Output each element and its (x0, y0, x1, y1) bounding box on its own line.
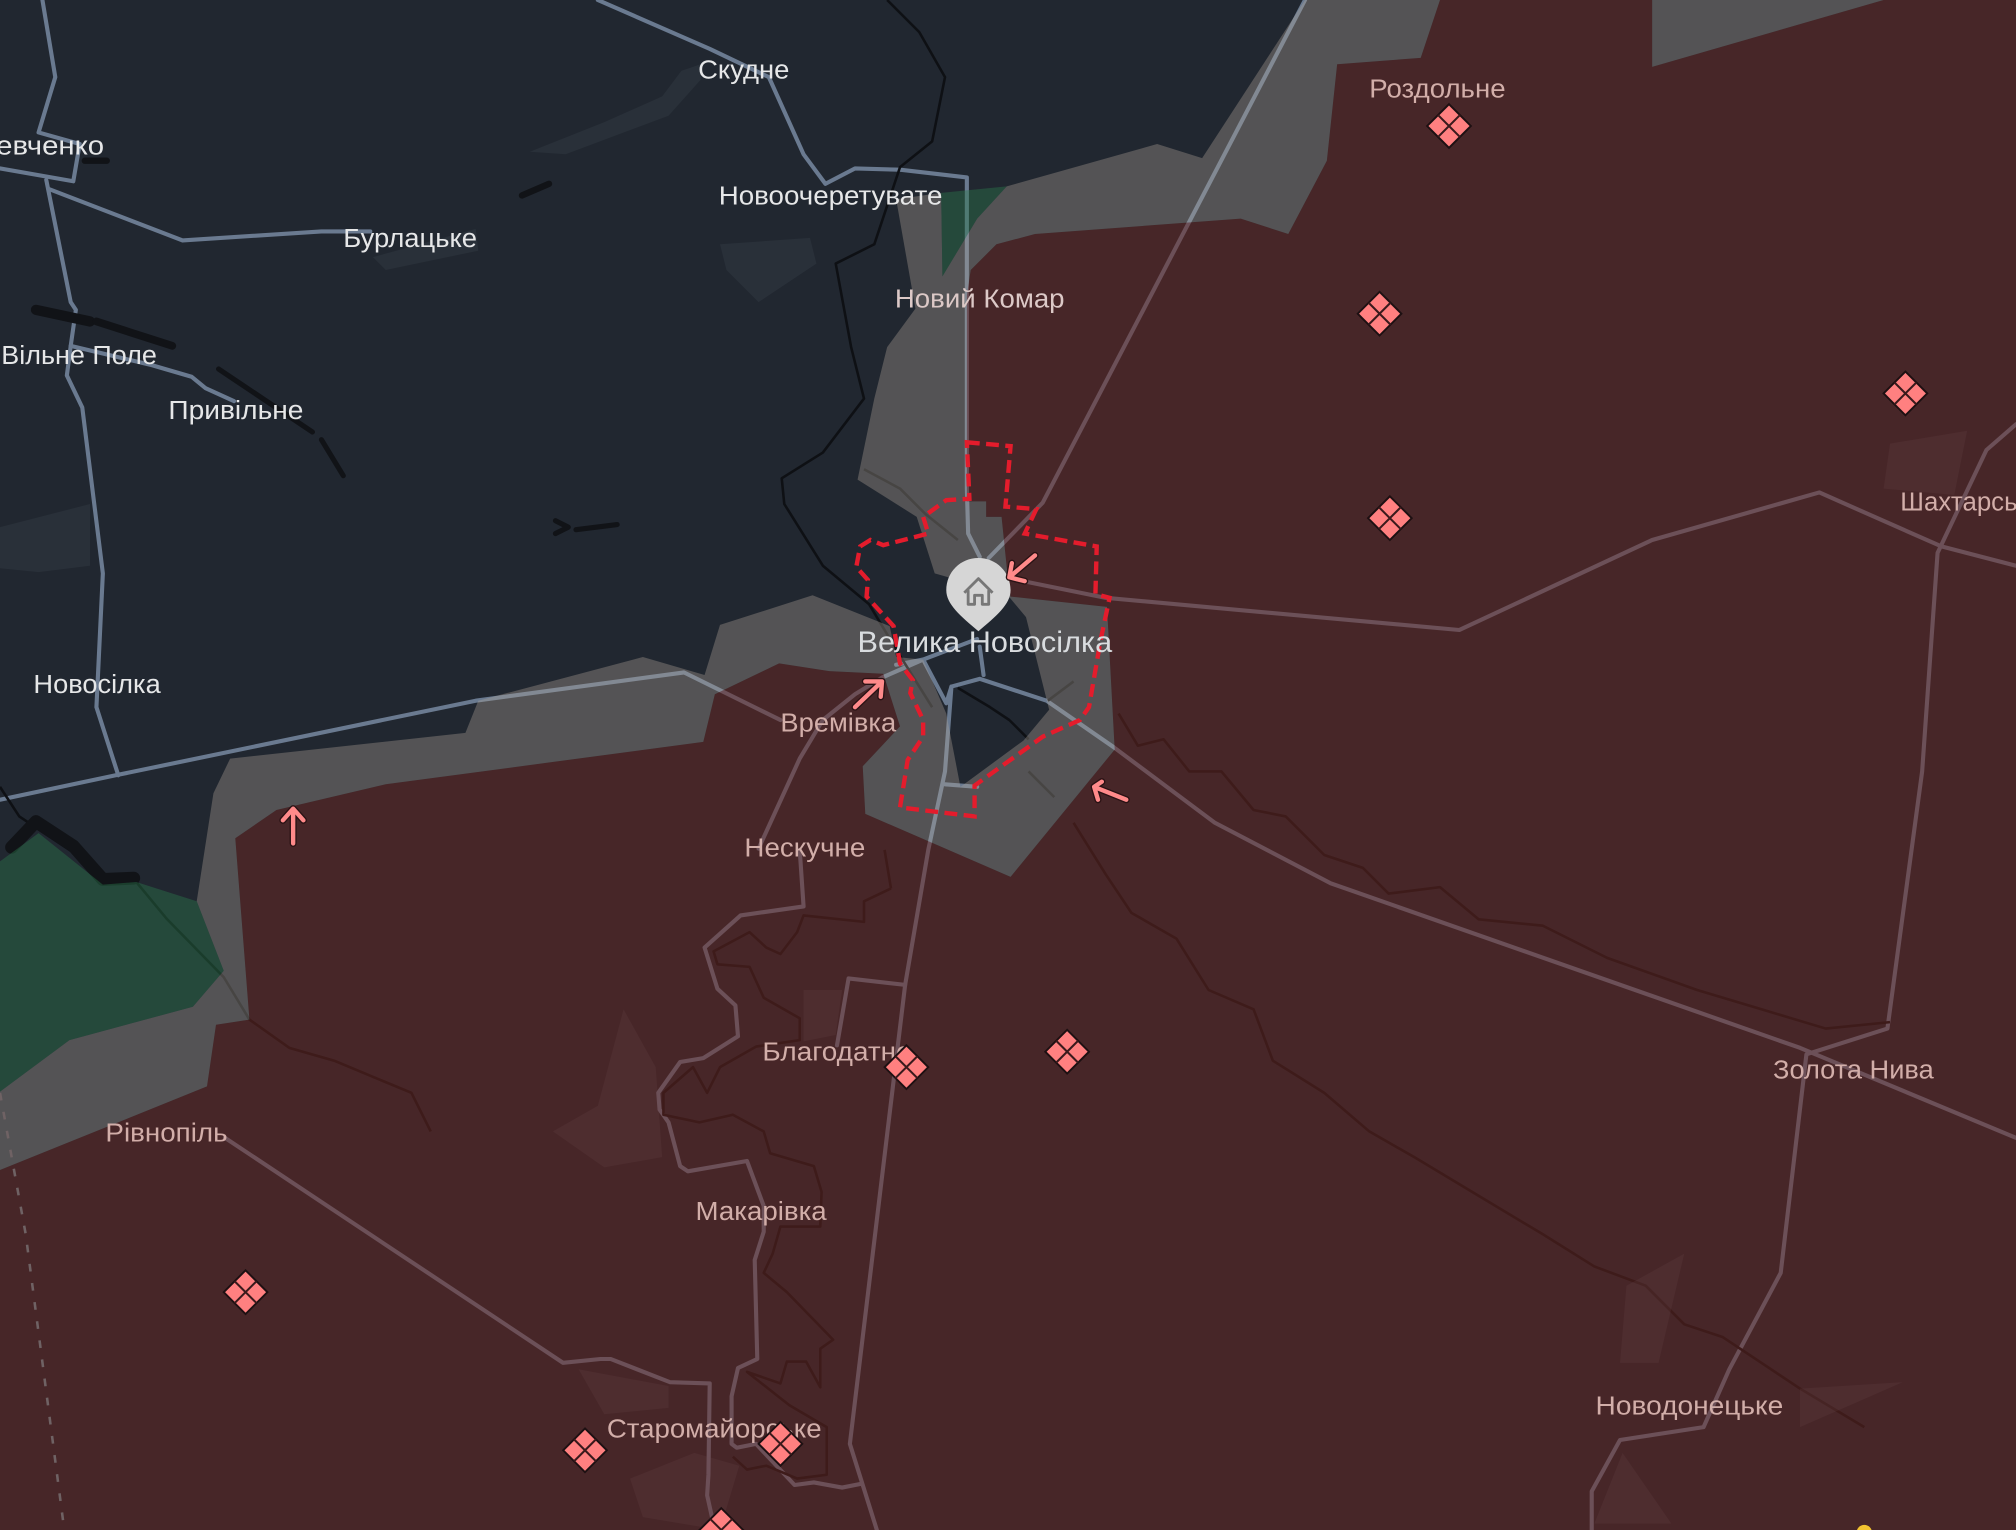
settlement patches on occupied area (553, 431, 1967, 1530)
label: Макарівка: Макарівка (696, 1198, 827, 1226)
arrow: west (1094, 782, 1126, 800)
label: Бурлацьке: Бурлацьке (343, 225, 477, 253)
dashed line: oblast border (0, 1093, 64, 1530)
label: Времівка: Времівка (780, 710, 897, 738)
territory: grey wedge top right (1652, 0, 1884, 67)
label: Новий Комар: Новий Комар (895, 285, 1065, 313)
arrow: north (283, 809, 303, 843)
label: Вільне Поле: Вільне Поле (1, 342, 157, 370)
territory: liberated area north (green) (941, 186, 1007, 276)
icon: attack marker (224, 1270, 267, 1314)
territory: liberated area west (green) (0, 833, 224, 1092)
arrow: south-west (1009, 555, 1035, 581)
label: Старомайорське: Старомайорське (607, 1415, 822, 1443)
label: Благодатне: Благодатне (762, 1039, 912, 1067)
label: Привільне: Привільне (168, 397, 303, 425)
label: Новосілка: Новосілка (33, 671, 161, 699)
label: Золота Нива: Золота Нива (1773, 1057, 1934, 1085)
icon: town pin with house (946, 558, 1011, 631)
label: Новодонецьке: Новодонецьке (1596, 1392, 1783, 1420)
icon: attack marker (1368, 496, 1412, 540)
icon: attack marker (1427, 104, 1471, 148)
icon: attack marker (1884, 372, 1927, 415)
label: Новоочеретувате: Новоочеретувате (719, 182, 942, 210)
label: Нескучне: Нескучне (744, 834, 865, 862)
icon: attack marker (1045, 1030, 1089, 1074)
terrain patches (0, 64, 816, 572)
label: Роздольне: Роздольне (1369, 76, 1506, 104)
red dashed outline: settlement boundary (856, 442, 1110, 816)
label: Рівнопіль: Рівнопіль (105, 1120, 228, 1148)
icon: attack marker (1358, 292, 1401, 336)
arrow: north-east (855, 681, 882, 707)
icon: attack marker (563, 1428, 607, 1472)
label: Скудне: Скудне (698, 56, 789, 84)
icon: attack marker (885, 1045, 928, 1089)
icon: attack marker (759, 1422, 802, 1466)
icon: yellow marker (1857, 1525, 1872, 1530)
territory: contested area (grey) (0, 0, 1440, 1170)
label: Велика Новосілка (main town): Велика Новосілка (858, 626, 1113, 659)
icon: attack marker (699, 1508, 743, 1530)
